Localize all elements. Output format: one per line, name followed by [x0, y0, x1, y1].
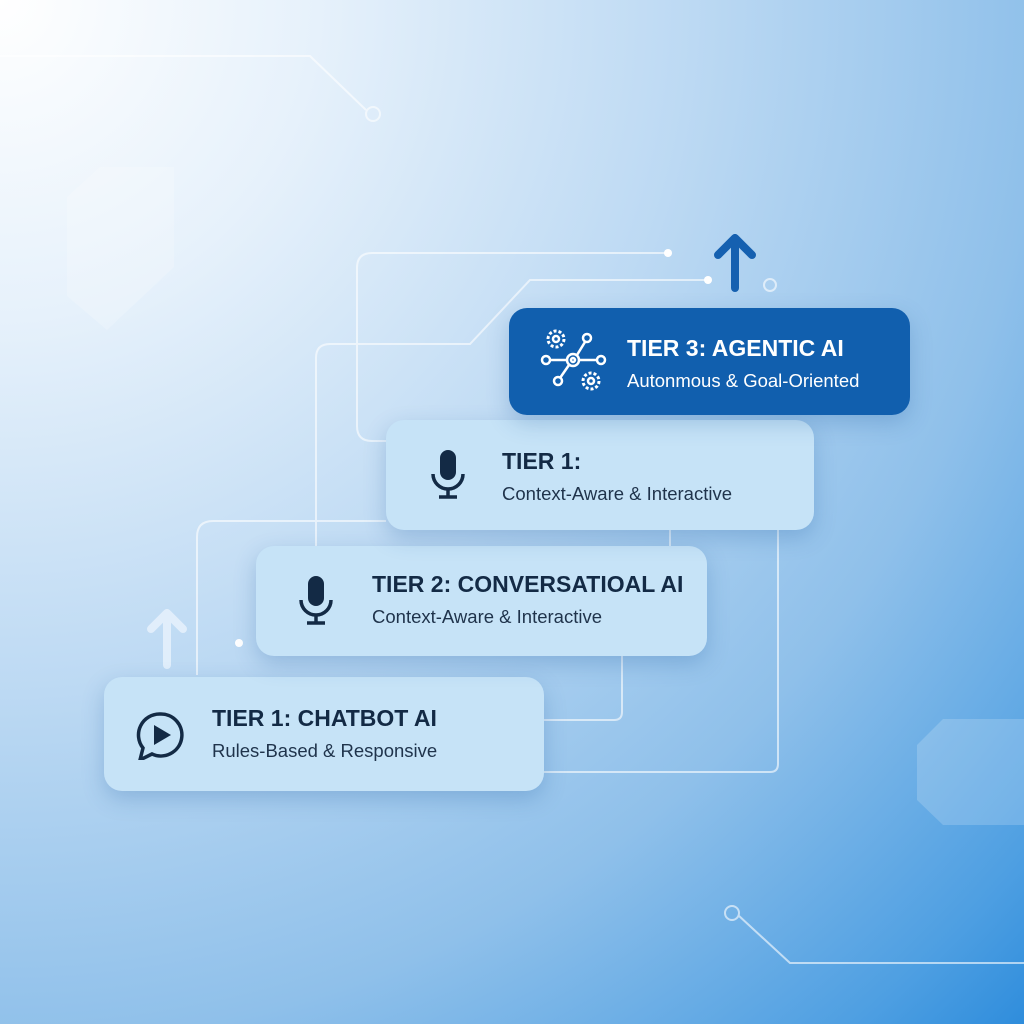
heading: TIER 1: CHATBOT AI [212, 705, 437, 731]
text: Context-Aware & Interactive [372, 606, 602, 627]
panel: tier 1 chatbot [104, 677, 544, 791]
arrow: left up [147, 609, 187, 669]
text: Context-Aware & Interactive [502, 483, 732, 504]
arrow: top up [714, 234, 756, 292]
panel: tier 3 agentic [509, 308, 910, 415]
text: Autonmous & Goal-Oriented [627, 370, 859, 391]
icon: chat play [136, 712, 184, 760]
panel: tier 2 conversational [256, 546, 707, 656]
icon: network gears [540, 330, 606, 390]
icon: mic [299, 576, 333, 625]
panel: tier 1 context [386, 420, 814, 530]
heading: TIER 1: [502, 448, 581, 474]
heading: TIER 2: CONVERSATIOAL AI [372, 571, 683, 597]
icon: mic [431, 450, 465, 499]
text: Rules-Based & Responsive [212, 740, 437, 761]
heading: TIER 3: AGENTIC AI [627, 335, 844, 361]
